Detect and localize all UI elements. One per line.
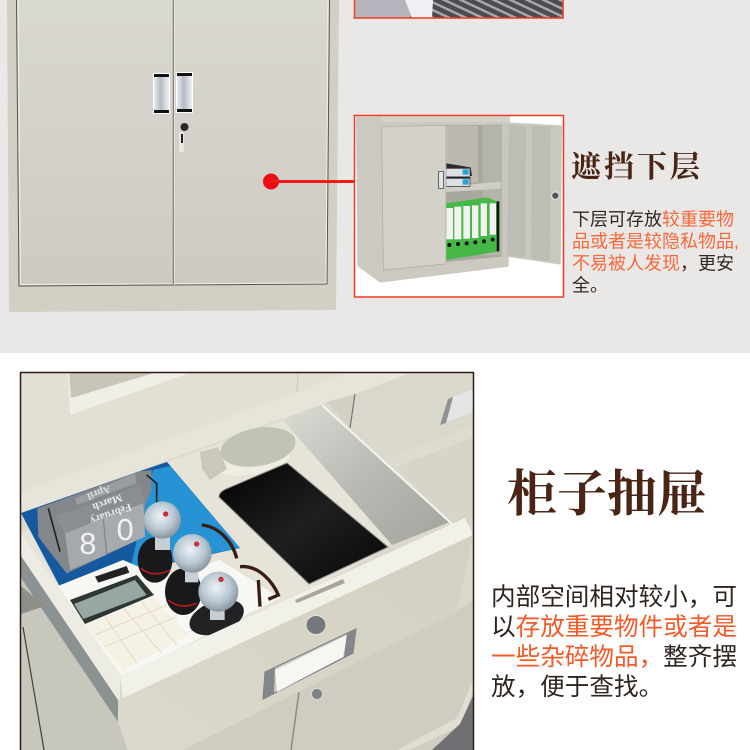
black wallet: [219, 463, 388, 584]
icon: side drawer handle: [440, 389, 473, 425]
calendar blocks: March: [91, 491, 123, 512]
drawer left wall: [21, 533, 120, 700]
glasses: [202, 525, 278, 607]
drawer lock: [306, 616, 326, 634]
photo: open lower cabinet: [354, 116, 564, 297]
drawer pull handle: [263, 629, 356, 699]
cabinet front with closed doors: [7, 0, 339, 312]
lower door knob: [312, 688, 322, 700]
open right door: [502, 122, 562, 265]
drawer top lip: [120, 518, 473, 698]
text block: lower shelf description: 下层可存放较重要物: [572, 210, 734, 230]
text block: drawer description: 放，便于查找。: [491, 673, 663, 701]
text block: lower shelf description: 品或者是较隐私物品,: [572, 232, 739, 252]
binders on upper shelf: [446, 163, 472, 187]
panel: grey upper section background: [0, 0, 750, 353]
calendar blocks: 8: [79, 527, 96, 561]
drawer right side wall: [283, 405, 450, 545]
stamps with crystal knobs: [138, 501, 249, 642]
lower cabinet doors: [183, 600, 473, 750]
white sheet: [58, 560, 280, 677]
calculator: [70, 566, 188, 670]
drawer floor: [21, 420, 392, 680]
icon: left door handle: [153, 73, 170, 114]
text block: drawer description: 以存放重要物件或者是: [491, 614, 737, 641]
calendar blocks: February: [88, 501, 133, 526]
icon: right door handle: [176, 72, 193, 113]
drawer slide rail: [21, 556, 118, 722]
magnifying glass and cube: [200, 422, 299, 480]
text block: drawer description: 内部空间相对较小，可: [491, 583, 737, 611]
heading: lower shelf: 遮挡下层: [571, 151, 703, 184]
upper cabinet doors: [21, 372, 473, 525]
calendar blocks: [37, 470, 157, 573]
icon: lock and key: [179, 123, 188, 152]
text block: lower shelf description: 不易被人发现，更安: [572, 254, 734, 274]
callout pointer: red dot and line: [263, 174, 355, 190]
drawer finger slot: [295, 579, 345, 603]
photo: cropped upper detail box: [354, 0, 563, 18]
text block: lower shelf description: 全。: [572, 276, 608, 296]
drawer front panel: [123, 535, 473, 750]
green binders on lower shelf: [446, 197, 499, 260]
text block: drawer description: 一些杂碎物品，整齐摆: [491, 644, 737, 671]
calendar blocks: April: [85, 483, 112, 501]
calendar, calculator and stamps: [37, 470, 278, 670]
heading: cabinet drawer: 柜子抽屉: [507, 466, 707, 522]
calendar blocks: 0: [117, 513, 134, 547]
blue paper: [21, 462, 240, 587]
photo: open drawer with office items: [20, 372, 474, 750]
left cabinet side: [21, 578, 128, 750]
